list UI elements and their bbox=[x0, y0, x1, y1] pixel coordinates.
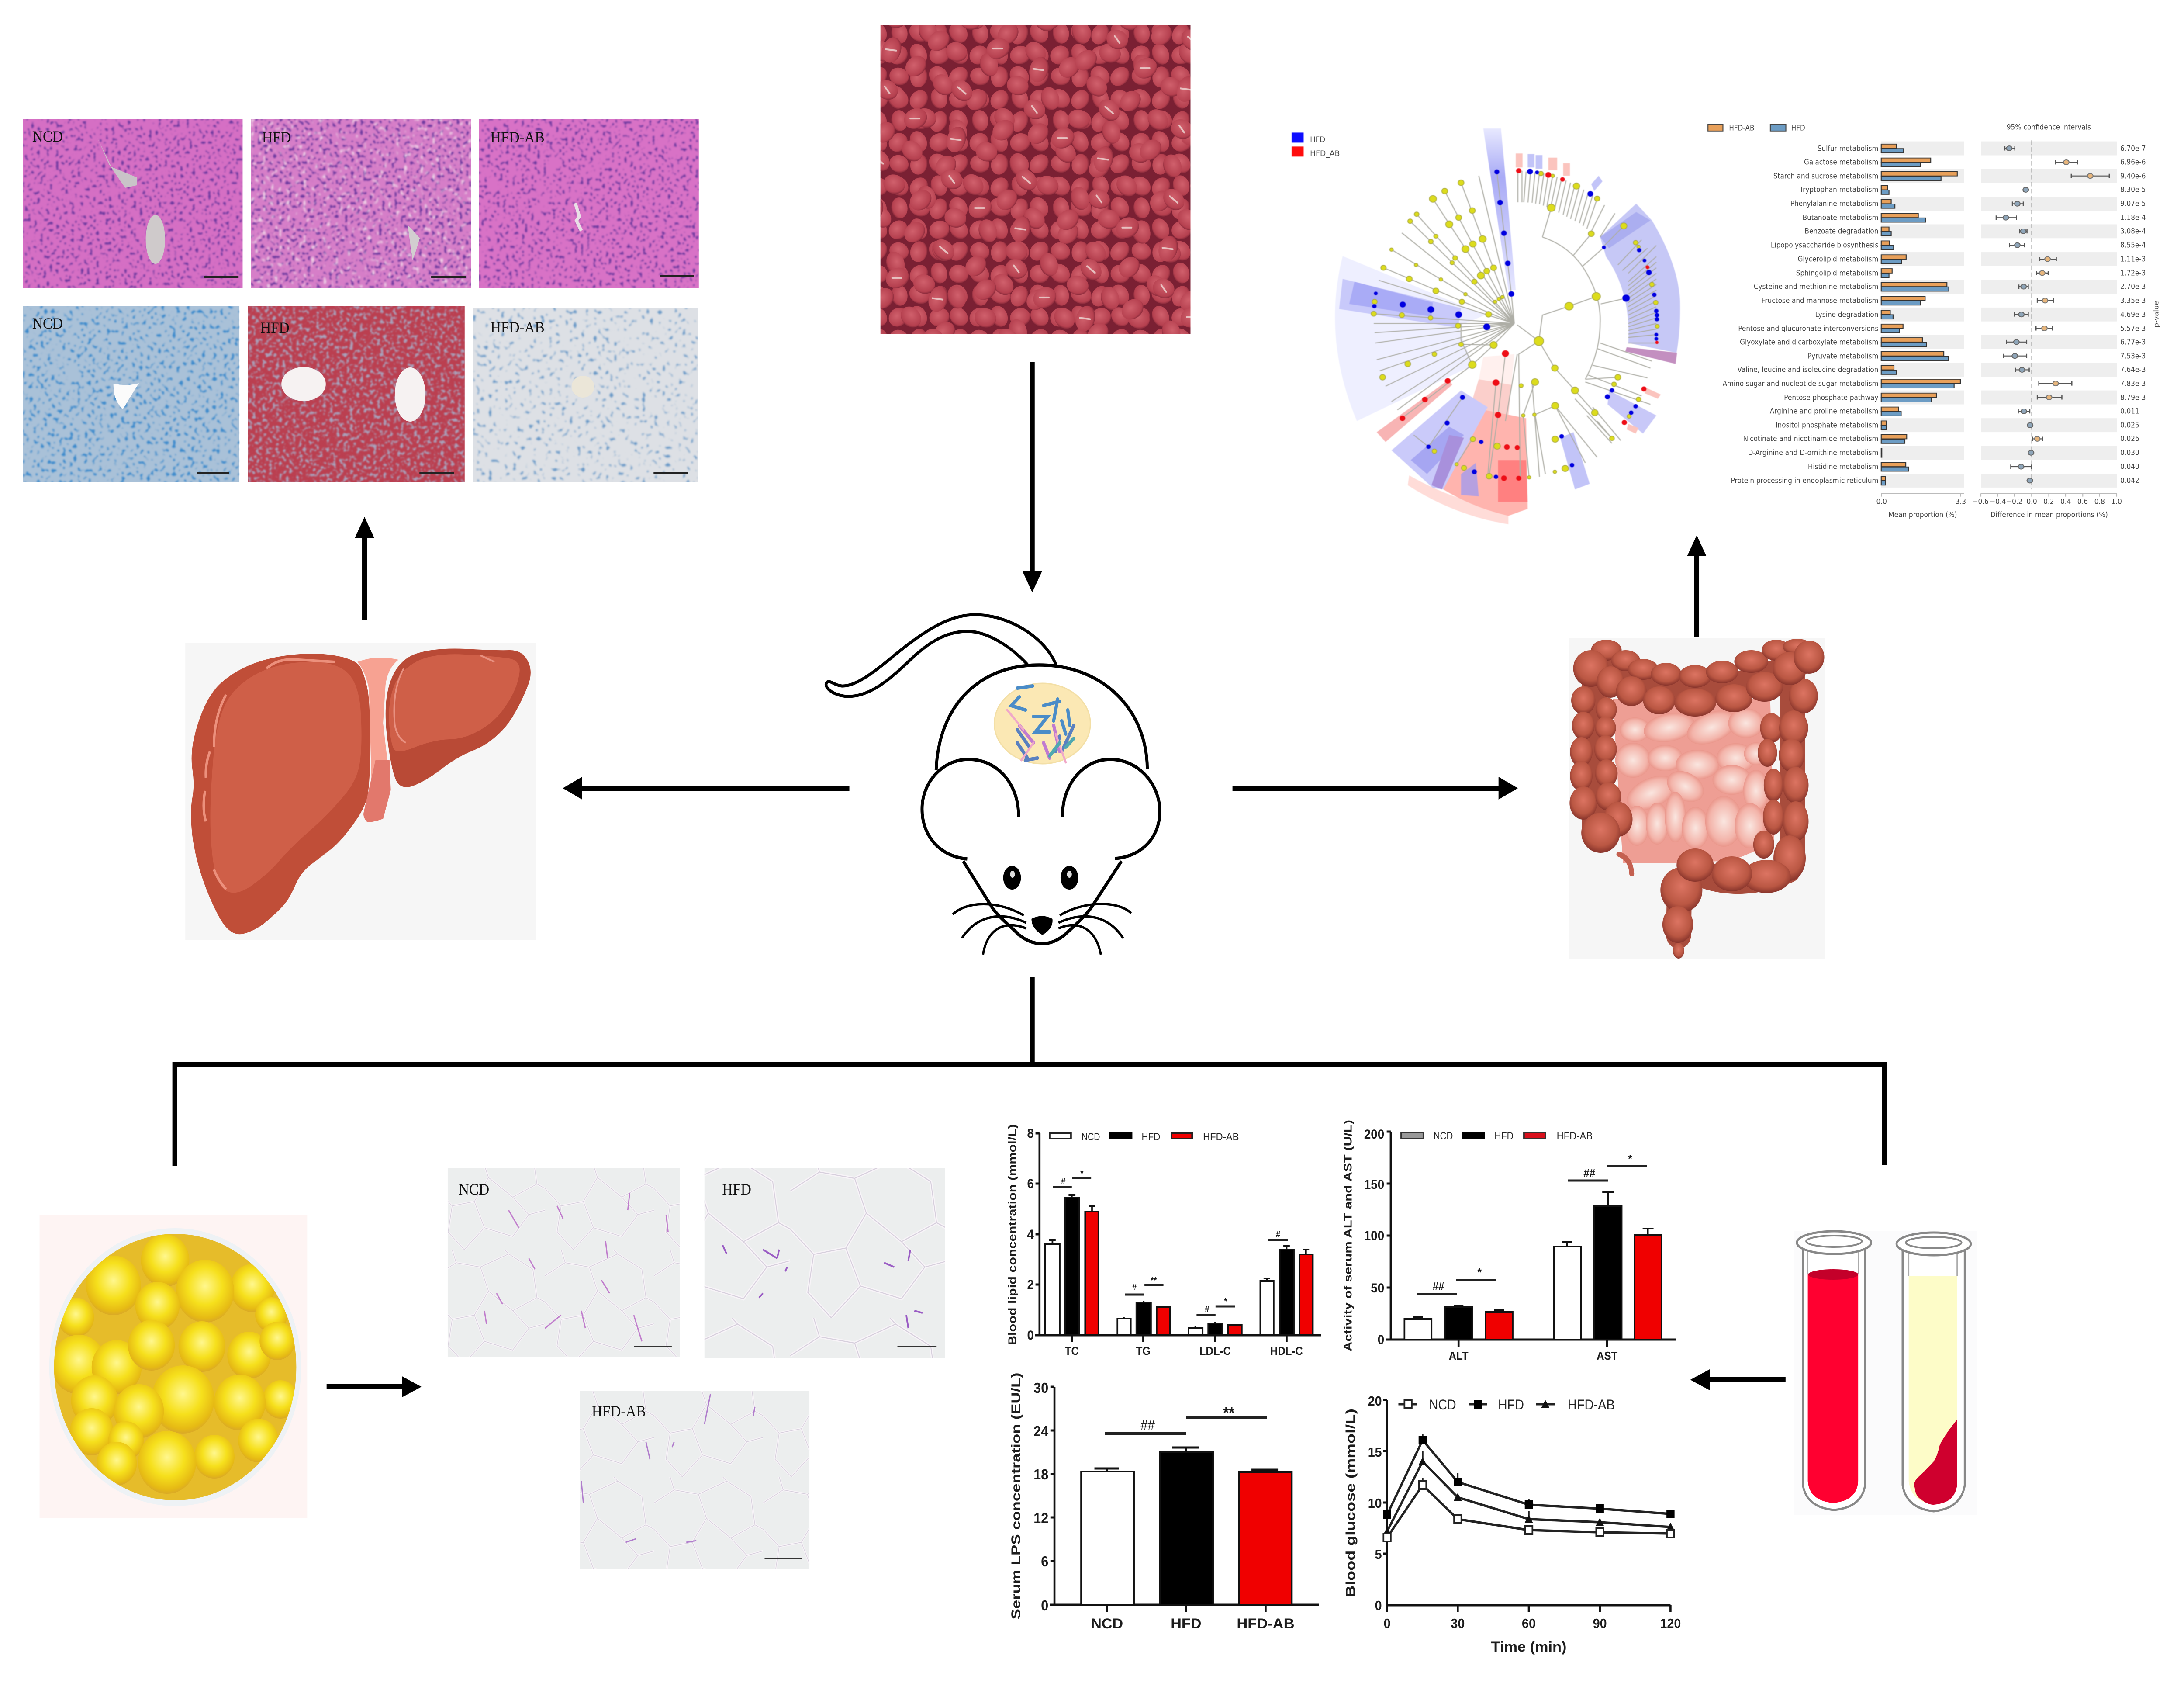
significance marks bbox=[1140, 1405, 1235, 1433]
pathway names: Histidine metabolism bbox=[1808, 462, 1878, 471]
significance bars bbox=[1105, 1417, 1267, 1434]
chart: KEGG pathway extended error bars bbox=[1708, 123, 2160, 519]
x-axis title: Time (min) bbox=[1491, 1639, 1566, 1655]
appendix bbox=[1619, 854, 1632, 874]
mean difference markers bbox=[2003, 146, 2034, 483]
micrograph: H&E NCD bbox=[23, 119, 242, 288]
arrow: serum to biochemical results bbox=[1690, 1369, 1786, 1390]
pathway names: Starch and sucrose metabolism bbox=[1773, 172, 1878, 180]
tick labels: 30 bbox=[1033, 1380, 1048, 1396]
x tick labels: 30 bbox=[1451, 1616, 1465, 1631]
microbiota in gut bbox=[994, 683, 1090, 764]
significance marks: ## bbox=[1140, 1417, 1155, 1433]
legend: NCD bbox=[1082, 1131, 1100, 1143]
y-axis title: Serum LPS concentration (EU/L) bbox=[1009, 1373, 1023, 1619]
pathway names: Butanoate metabolism bbox=[1803, 213, 1878, 222]
axis labels: Difference in mean proportions (%) bbox=[1990, 510, 2108, 519]
arrow: adipose to histology bbox=[327, 1376, 422, 1397]
sigmoid colon and rectum bbox=[1660, 848, 1791, 959]
tick labels: 24 bbox=[1033, 1423, 1048, 1439]
legend labels and CI heading: HFD bbox=[1791, 124, 1805, 132]
p-values: 4.69e-3 bbox=[2120, 310, 2146, 319]
category labels: HDL-C bbox=[1270, 1345, 1303, 1357]
significance marks: # bbox=[1061, 1177, 1066, 1186]
pathway names: Glycerolipid metabolism bbox=[1798, 255, 1878, 263]
axis labels: −0.4 bbox=[1990, 497, 2006, 506]
axis labels: p-value bbox=[2152, 301, 2160, 328]
orange bars HFD-AB bbox=[1881, 144, 1960, 481]
category labels: TG bbox=[1136, 1345, 1151, 1357]
category labels bbox=[1065, 1345, 1303, 1357]
category labels: HFD-AB bbox=[1237, 1616, 1294, 1631]
small intestine bbox=[1613, 699, 1774, 863]
axis labels: 0.0 bbox=[2026, 497, 2037, 506]
right lobe bbox=[386, 648, 531, 787]
p-values: 0.026 bbox=[2120, 434, 2139, 443]
y-axis title: Blood lipid concentration (mmol/L) bbox=[1006, 1124, 1019, 1345]
blue bars HFD bbox=[1881, 149, 1954, 485]
p-values bbox=[2120, 144, 2146, 485]
transverse colon front bbox=[1573, 641, 1825, 717]
significance marks: # bbox=[1276, 1230, 1280, 1240]
p-values: 7.83e-3 bbox=[2120, 379, 2146, 388]
y-axis title: Blood glucose (mmol/L) bbox=[1344, 1409, 1358, 1597]
p-values: 2.70e-3 bbox=[2120, 282, 2146, 291]
mouse face bbox=[963, 861, 1121, 944]
legend: HFD-AB bbox=[1203, 1131, 1239, 1143]
error bars bbox=[1423, 1434, 1529, 1519]
tick labels: 2 bbox=[1027, 1278, 1034, 1292]
arrow: mouse to gut bbox=[1233, 777, 1518, 800]
p-values: 1.18e-4 bbox=[2120, 213, 2146, 222]
bracket: mouse to fat and serum bbox=[175, 977, 1884, 1166]
axes bbox=[1035, 1133, 1321, 1342]
yellow non-significant nodes bbox=[1371, 171, 1659, 479]
category labels: NCD bbox=[1091, 1616, 1123, 1631]
axis labels: 0.6 bbox=[2077, 497, 2088, 506]
NCD markers bbox=[1383, 1481, 1674, 1541]
legend: HFD-AB bbox=[1557, 1130, 1593, 1142]
x tick labels: 120 bbox=[1660, 1616, 1681, 1631]
axes bbox=[1383, 1400, 1670, 1612]
icon: mouse with microbiota bbox=[826, 615, 1160, 955]
mouse eyes bbox=[1003, 866, 1078, 890]
tick labels: 50 bbox=[1371, 1281, 1384, 1295]
chart: blood lipid concentration bbox=[1006, 1124, 1321, 1357]
pathway names: Phenylalanine metabolism bbox=[1790, 199, 1878, 208]
micrograph: adipose HFD-AB bbox=[580, 1391, 809, 1569]
pathway names: Cysteine and methionine metabolism bbox=[1754, 282, 1878, 291]
red HFD_AB-enriched nodes bbox=[1400, 168, 1659, 481]
pathway names: Arginine and proline metabolism bbox=[1770, 407, 1878, 416]
chart: blood glucose over time bbox=[1344, 1394, 1681, 1655]
legend bbox=[1398, 1397, 1615, 1413]
mouse left ear bbox=[922, 759, 1019, 859]
p-values: 0.042 bbox=[2120, 476, 2139, 485]
cladogram legend labels: HFD_AB bbox=[1310, 149, 1340, 158]
micrograph: oil red NCD bbox=[23, 306, 239, 482]
tick labels: 6 bbox=[1041, 1553, 1048, 1569]
micrograph: adipose NCD bbox=[448, 1168, 680, 1357]
legend: HFD bbox=[1142, 1131, 1160, 1143]
panel: adipose histology bbox=[448, 1168, 945, 1569]
pathway names: Galactose metabolism bbox=[1804, 158, 1878, 166]
cladogram branches bbox=[1374, 170, 1656, 478]
significance marks: ** bbox=[1151, 1276, 1157, 1285]
axes bbox=[1881, 493, 2117, 497]
legend: HFD bbox=[1498, 1397, 1524, 1413]
blue HFD-enriched nodes bbox=[1372, 169, 1659, 479]
pathway names: Pentose and glucuronate interconversions bbox=[1738, 324, 1878, 333]
pathway names: D-Arginine and D-ornithine metabolism bbox=[1748, 448, 1878, 457]
micrograph: adipose HFD: HFD bbox=[722, 1181, 751, 1198]
bars bbox=[1045, 1198, 1313, 1335]
pathway names: Fructose and mannose metabolism bbox=[1762, 296, 1878, 305]
tick labels: 200 bbox=[1364, 1127, 1384, 1142]
illustration: adipose tissue bbox=[40, 1216, 307, 1518]
legend: NCD bbox=[1429, 1397, 1456, 1413]
axis labels bbox=[1876, 301, 2160, 519]
pathway names: Pentose phosphate pathway bbox=[1784, 393, 1878, 402]
p-values: 8.55e-4 bbox=[2120, 241, 2146, 249]
pathway names: Tryptophan metabolism bbox=[1799, 185, 1878, 194]
p-values: 1.11e-3 bbox=[2120, 255, 2146, 263]
p-values: 6.70e-7 bbox=[2120, 144, 2146, 153]
legend bbox=[1401, 1130, 1593, 1142]
arrow: beans to mouse bbox=[1023, 362, 1042, 592]
tick labels: 0 bbox=[1041, 1597, 1048, 1614]
p-values: 5.57e-3 bbox=[2120, 324, 2146, 333]
error bars bbox=[1049, 1195, 1309, 1328]
axis labels: 3.3 bbox=[1956, 497, 1966, 506]
x tick labels bbox=[1384, 1616, 1681, 1631]
micrograph: oil red NCD: NCD bbox=[32, 315, 63, 332]
axis labels: 0.4 bbox=[2060, 497, 2071, 506]
tick labels: 100 bbox=[1364, 1229, 1384, 1243]
error bars bbox=[1413, 1192, 1654, 1319]
tick labels: 8 bbox=[1027, 1126, 1034, 1141]
micrograph: H&E HFD: HFD bbox=[262, 129, 291, 146]
micrograph: adipose HFD bbox=[705, 1168, 945, 1358]
p-values: 0.011 bbox=[2120, 407, 2139, 416]
panel: liver oil red O histology bbox=[23, 306, 698, 482]
p-values: 3.08e-4 bbox=[2120, 227, 2146, 235]
shaded clade sectors bbox=[1335, 128, 1680, 524]
legend labels and CI heading: 95% confidence intervals bbox=[2007, 123, 2091, 132]
significance marks: * bbox=[1224, 1297, 1227, 1306]
pathway names bbox=[1723, 144, 1878, 485]
cladogram legend labels bbox=[1310, 135, 1340, 158]
micrograph: adipose HFD-AB: HFD-AB bbox=[592, 1403, 646, 1420]
pathway names: Sulfur metabolism bbox=[1818, 144, 1878, 153]
chart: LEfSe cladogram bbox=[1292, 128, 1680, 524]
axis labels: 0.8 bbox=[2094, 497, 2105, 506]
colon rear haustra bbox=[1591, 639, 1812, 688]
pathway names: Glyoxylate and dicarboxylate metabolism bbox=[1740, 338, 1878, 346]
tick labels: 4 bbox=[1027, 1227, 1034, 1242]
significance marks: # bbox=[1132, 1283, 1137, 1292]
tick labels: 5 bbox=[1375, 1547, 1382, 1562]
illustration: blood tubes bbox=[1794, 1231, 1977, 1515]
x tick labels: 90 bbox=[1593, 1616, 1607, 1631]
legend labels and CI heading bbox=[1729, 123, 2091, 132]
y-axis title: Activity of serum ALT and AST (U/L) bbox=[1341, 1120, 1354, 1351]
cladogram legend labels: HFD bbox=[1310, 135, 1325, 144]
micrograph: oil red HFD-AB: HFD-AB bbox=[491, 319, 545, 336]
mouse nose bbox=[1031, 916, 1053, 935]
blood clot bbox=[1914, 1420, 1957, 1505]
pathway names: Lipopolysaccharide biosynthesis bbox=[1771, 241, 1878, 249]
pathway names: Amino sugar and nucleotide sugar metabolism bbox=[1723, 379, 1878, 388]
HFD-AB markers bbox=[1383, 1457, 1675, 1535]
tick labels bbox=[1033, 1380, 1048, 1614]
micrograph: adipose NCD: NCD bbox=[459, 1181, 489, 1198]
axis labels: −0.6 bbox=[1973, 497, 1989, 506]
legend labels and CI heading: HFD-AB bbox=[1729, 124, 1754, 132]
tick labels: 0 bbox=[1378, 1333, 1384, 1347]
arrow: liver to histology bbox=[355, 517, 374, 620]
descending colon bbox=[1753, 679, 1818, 881]
significance marks: ** bbox=[1223, 1405, 1235, 1422]
p-values: 6.96e-6 bbox=[2120, 158, 2146, 166]
legend: HFD-AB bbox=[1568, 1397, 1615, 1413]
p-values: 7.53e-3 bbox=[2120, 352, 2146, 360]
falciform ligament bbox=[357, 658, 398, 822]
tick labels: 150 bbox=[1364, 1177, 1384, 1192]
colon underlay bbox=[1595, 660, 1804, 935]
pathway names: Valine, leucine and isoleucine degradation bbox=[1738, 365, 1878, 374]
pathway names: Inositol phosphate metabolism bbox=[1776, 421, 1878, 429]
p-values: 1.72e-3 bbox=[2120, 269, 2146, 277]
legend: NCD bbox=[1434, 1130, 1453, 1142]
pathway names: Lysine degradation bbox=[1815, 310, 1878, 319]
pathway names: Pyruvate metabolism bbox=[1807, 352, 1878, 360]
arrow: gut to microbiome results bbox=[1687, 535, 1707, 637]
photo: adzuki beans bbox=[881, 25, 1191, 334]
micrograph: H&E NCD: NCD bbox=[32, 128, 63, 145]
separated serum tube bbox=[1897, 1233, 1971, 1511]
x tick labels: 60 bbox=[1522, 1616, 1536, 1631]
p-values: 9.40e-6 bbox=[2120, 172, 2146, 180]
category labels: LDL-C bbox=[1199, 1345, 1231, 1357]
pathway names: Sphingolipid metabolism bbox=[1796, 269, 1878, 277]
illustration: liver bbox=[185, 643, 536, 940]
significance marks: * bbox=[1478, 1266, 1482, 1279]
p-values: 9.07e-5 bbox=[2120, 199, 2146, 208]
p-values: 0.025 bbox=[2120, 421, 2139, 429]
micrograph: oil red HFD: HFD bbox=[260, 319, 290, 336]
micrograph: H&E HFD bbox=[251, 119, 471, 288]
tick labels: 6 bbox=[1027, 1177, 1034, 1191]
ascending colon bbox=[1569, 686, 1633, 853]
significance marks: * bbox=[1080, 1169, 1084, 1178]
HFD markers bbox=[1383, 1436, 1675, 1519]
axes bbox=[1386, 1132, 1676, 1347]
pathway names: Nicotinate and nicotinamide metabolism bbox=[1743, 434, 1878, 443]
pathway names: Protein processing in endoplasmic reticulum bbox=[1731, 476, 1878, 485]
micrograph: oil red HFD-AB bbox=[473, 308, 698, 482]
significance marks: ## bbox=[1583, 1167, 1595, 1180]
p-values: 3.35e-3 bbox=[2120, 296, 2146, 305]
axis labels: 1.0 bbox=[2111, 497, 2122, 506]
series lines bbox=[1387, 1440, 1670, 1538]
significance marks: * bbox=[1628, 1153, 1632, 1165]
tick labels: 10 bbox=[1368, 1496, 1382, 1511]
significance bars bbox=[1053, 1178, 1288, 1315]
axis labels: 0.0 bbox=[1876, 497, 1887, 506]
illustration: intestines bbox=[1569, 638, 1825, 959]
mouse right ear bbox=[1062, 759, 1160, 859]
pathway names: Benzoate degradation bbox=[1805, 227, 1878, 235]
zero reference line bbox=[2031, 140, 2032, 489]
significance marks bbox=[1433, 1153, 1632, 1293]
significance marks: # bbox=[1205, 1305, 1209, 1314]
p-values: 7.64e-3 bbox=[2120, 365, 2146, 374]
mouse body bbox=[936, 665, 1147, 770]
bars bbox=[1404, 1206, 1662, 1340]
axis labels: Mean proportion (%) bbox=[1889, 510, 1957, 519]
tick labels: 18 bbox=[1033, 1466, 1048, 1482]
tick labels: 15 bbox=[1368, 1445, 1382, 1460]
significance marks bbox=[1061, 1169, 1280, 1314]
mouse tail bbox=[826, 615, 1056, 696]
cladogram legend bbox=[1292, 132, 1303, 156]
tick labels bbox=[1027, 1126, 1034, 1343]
category labels bbox=[1449, 1350, 1618, 1362]
category labels: HFD bbox=[1171, 1616, 1201, 1631]
micrograph: oil red HFD bbox=[248, 306, 465, 482]
tick labels bbox=[1364, 1127, 1384, 1347]
micrograph: H&E HFD-AB: HFD-AB bbox=[491, 129, 545, 146]
chart: serum ALT and AST bbox=[1341, 1120, 1676, 1362]
tick labels: 12 bbox=[1033, 1510, 1048, 1526]
p-values: 0.030 bbox=[2120, 448, 2139, 457]
tick labels: 0 bbox=[1375, 1598, 1382, 1613]
significance bars bbox=[1417, 1166, 1647, 1294]
chart: serum LPS concentration bbox=[1009, 1373, 1319, 1631]
axes bbox=[1050, 1387, 1319, 1612]
micrograph: H&E HFD-AB bbox=[479, 119, 699, 288]
p-values: 8.79e-3 bbox=[2120, 393, 2146, 402]
confidence intervals bbox=[1996, 146, 2109, 481]
significance marks: ## bbox=[1433, 1280, 1444, 1293]
axis labels: 0.2 bbox=[2043, 497, 2054, 506]
p-values: 8.30e-5 bbox=[2120, 185, 2146, 194]
category labels: TC bbox=[1065, 1345, 1079, 1357]
category labels: AST bbox=[1597, 1350, 1618, 1362]
legend: HFD bbox=[1494, 1130, 1514, 1142]
tick labels bbox=[1368, 1394, 1382, 1613]
left lobe bbox=[191, 654, 370, 934]
error bars bbox=[1095, 1448, 1278, 1472]
legend swatches bbox=[1708, 124, 1723, 131]
panel: liver H&E histology bbox=[23, 119, 699, 288]
fat droplets bbox=[51, 1234, 298, 1494]
axis labels: −0.2 bbox=[2006, 497, 2022, 506]
category labels: ALT bbox=[1449, 1350, 1469, 1362]
mouse whiskers bbox=[953, 904, 1131, 955]
p-values: 0.040 bbox=[2120, 462, 2139, 471]
row bands and bars bbox=[1708, 124, 2117, 497]
p-values: 6.77e-3 bbox=[2120, 338, 2146, 346]
tick labels: 20 bbox=[1368, 1394, 1382, 1409]
bars bbox=[1081, 1452, 1292, 1605]
legend bbox=[1050, 1131, 1239, 1143]
x tick labels: 0 bbox=[1384, 1616, 1391, 1631]
arrow: mouse to liver bbox=[563, 777, 850, 800]
whole blood tube bbox=[1797, 1231, 1871, 1510]
tick labels: 0 bbox=[1027, 1328, 1034, 1343]
category labels bbox=[1091, 1616, 1294, 1631]
